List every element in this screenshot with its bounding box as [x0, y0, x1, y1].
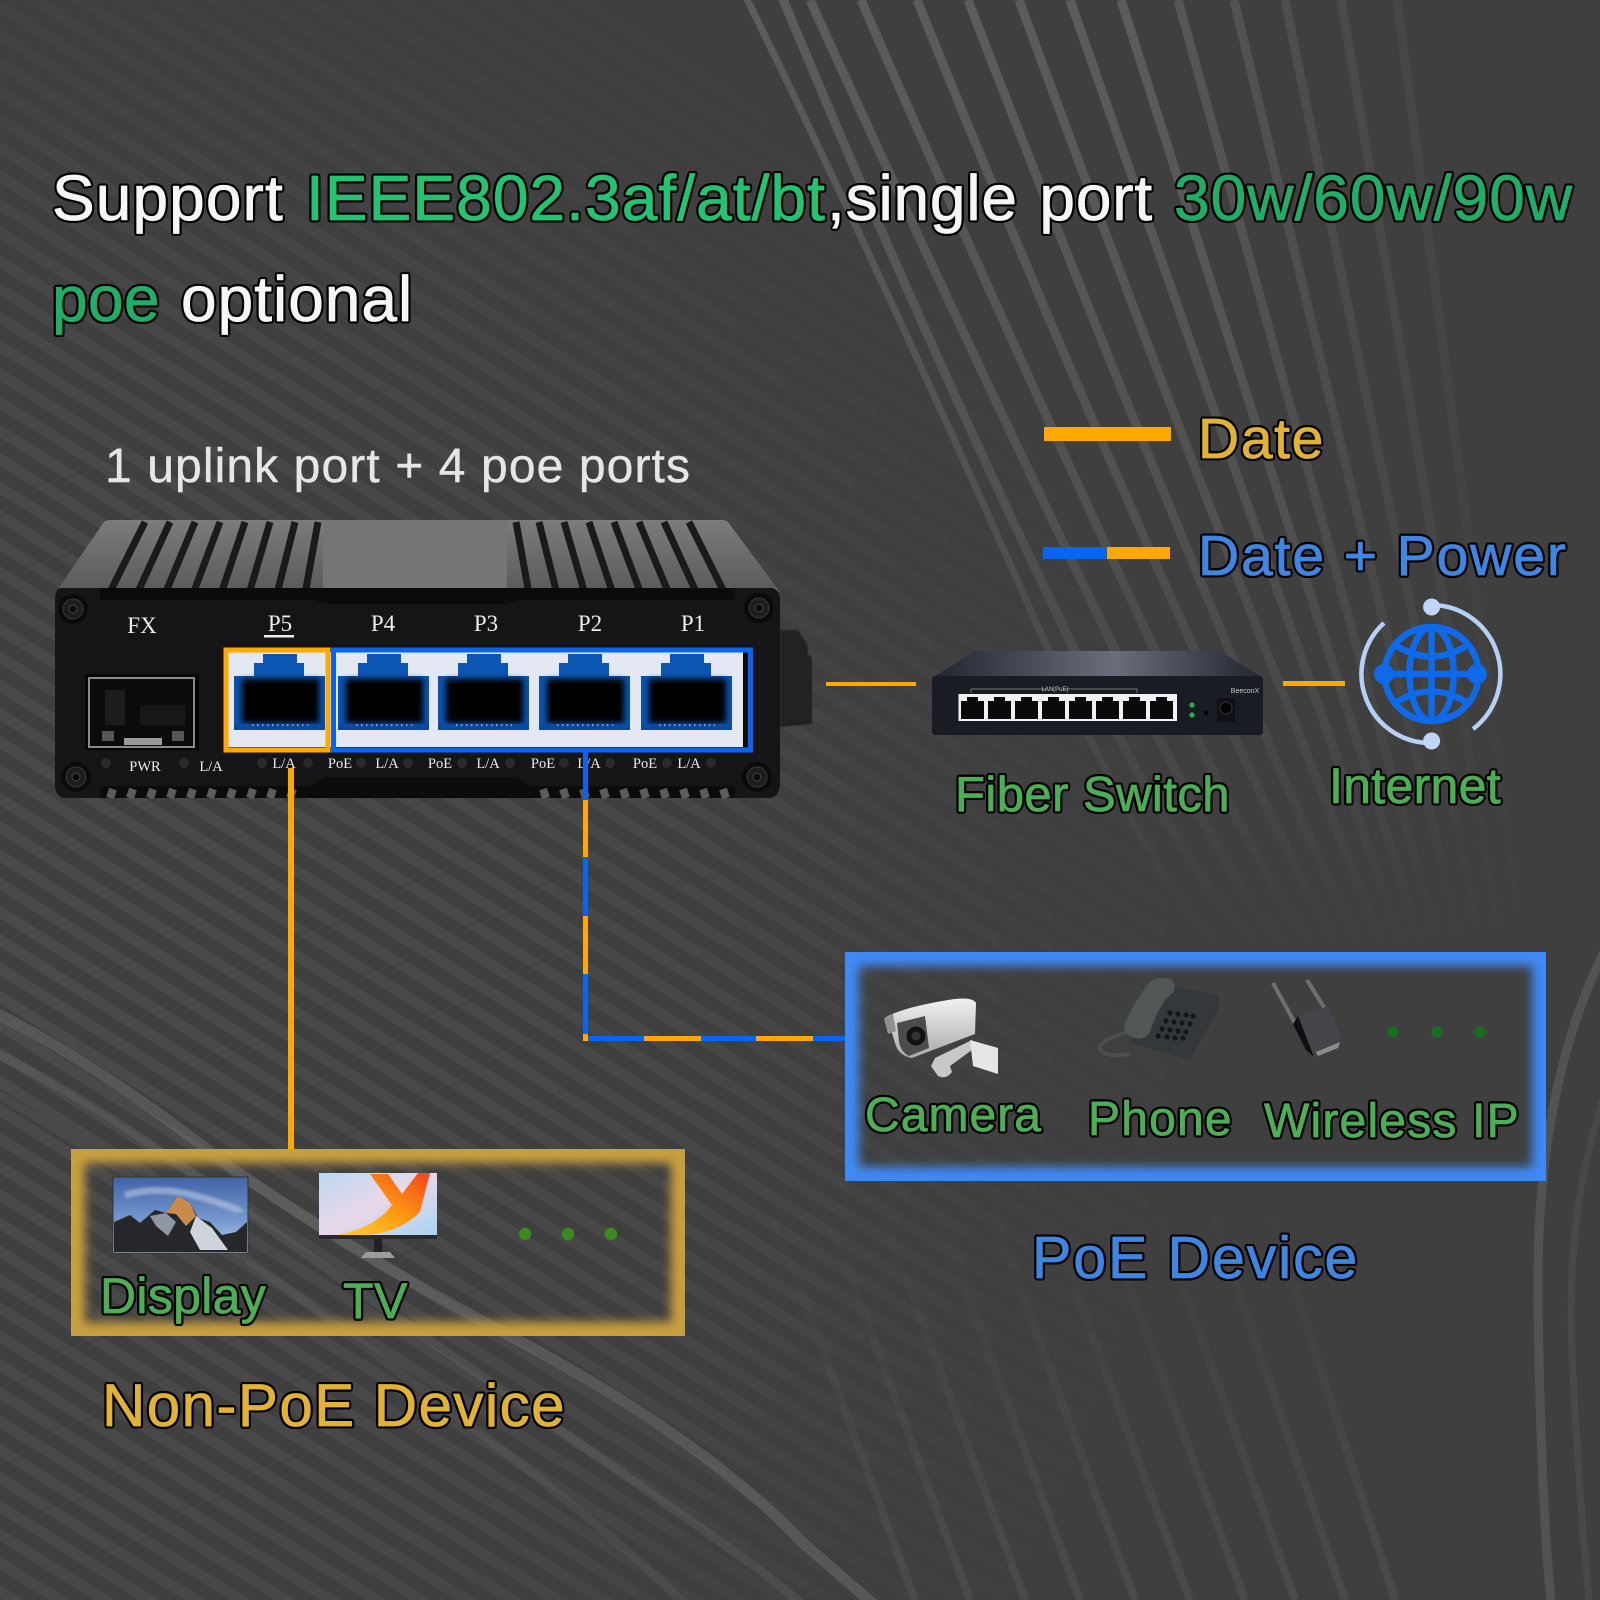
legend: data line — [1044, 427, 1171, 441]
title: IEEE802.3af/at/bt — [306, 162, 826, 234]
port labels: P2 — [578, 611, 602, 636]
reset button — [1204, 710, 1208, 716]
fiber switch — [932, 651, 1263, 735]
connection line: fiber switch to internet — [1283, 681, 1345, 686]
port labels: P5 — [268, 611, 292, 636]
blue PoE ports highlight — [334, 650, 750, 750]
LED labels: L/A — [199, 759, 223, 775]
DC jack — [1217, 698, 1235, 722]
status LEDs — [1189, 702, 1195, 718]
switch ports — [958, 694, 1177, 721]
LED labels: L/A — [476, 756, 500, 772]
connection line: P5 to non-PoE device — [288, 768, 294, 1150]
port labels — [127, 611, 705, 638]
legend — [1043, 407, 1568, 588]
legend: data label: Date — [1198, 407, 1325, 471]
icon: wireless access point — [1273, 980, 1342, 1057]
LED labels: PWR — [129, 759, 161, 775]
TV label: TV — [343, 1273, 408, 1329]
ellipsis dots — [519, 1228, 617, 1240]
device top with heat-sink fins — [56, 520, 780, 594]
LED labels: PoE — [428, 756, 452, 772]
wireless IP label: Wireless IP — [1264, 1095, 1520, 1148]
orbit dots — [1423, 598, 1440, 750]
white port panel — [228, 652, 743, 747]
LAN bracket — [971, 689, 1137, 693]
title: 30w/60w/90w — [1174, 162, 1573, 234]
right side terminal connector — [780, 630, 812, 727]
connection line: PoE ports to PoE device — [583, 752, 845, 1041]
title: optional — [181, 263, 413, 335]
title: ,single port — [827, 162, 1153, 234]
globe — [1385, 627, 1479, 721]
brand label: BeeconX — [1231, 688, 1260, 695]
LED labels: L/A — [272, 756, 296, 772]
LED labels: PoE — [633, 756, 657, 772]
connection line: switch to fiber switch — [826, 682, 916, 686]
screws — [58, 593, 774, 792]
LED labels — [129, 756, 701, 775]
LAN label: LAN(PoE) — [1041, 687, 1069, 693]
LED labels: L/A — [677, 756, 701, 772]
RJ45 port P4 — [338, 654, 429, 730]
title — [52, 162, 1575, 337]
port labels: P4 — [371, 611, 396, 636]
icon: security camera — [884, 999, 998, 1077]
PoE device heading: PoE Device — [1032, 1225, 1359, 1291]
device front face — [55, 588, 780, 798]
icon: desk phone — [1100, 978, 1219, 1060]
orange P5 highlight — [226, 650, 328, 750]
P5 underline — [264, 635, 294, 638]
black strip right of panel — [743, 653, 747, 746]
port labels: P1 — [681, 611, 705, 636]
legend: data + power label: Date + Power — [1198, 524, 1568, 588]
icon: internet globe — [1361, 598, 1500, 750]
switch top — [932, 651, 1263, 678]
RJ45 port P5 — [234, 654, 325, 730]
display label: Display — [100, 1268, 266, 1324]
port labels: FX — [127, 613, 157, 638]
icon: display with mountain — [113, 1177, 248, 1262]
panel: non-PoE devices — [71, 1149, 685, 1336]
LED labels: PoE — [328, 756, 352, 772]
internet label: Internet — [1329, 758, 1501, 814]
RJ45 port P1 — [641, 654, 732, 730]
LED labels: L/A — [577, 756, 601, 772]
camera label: Camera — [865, 1089, 1042, 1142]
orbit arcs — [1361, 605, 1500, 743]
subtitle: port count: 1 uplink port + 4 poe ports — [105, 440, 691, 493]
SFP fiber port — [85, 674, 199, 750]
LED labels: L/A — [375, 756, 399, 772]
legend: data + power line — [1043, 547, 1170, 559]
non-PoE device heading: Non-PoE Device — [102, 1372, 566, 1439]
icon: monitor — [319, 1173, 437, 1258]
panel: PoE devices — [845, 952, 1546, 1181]
port labels: P3 — [474, 611, 498, 636]
switch front — [932, 676, 1263, 735]
LED labels: PoE — [531, 756, 555, 772]
LED indicators — [101, 758, 716, 768]
RJ45 port P2 — [539, 654, 630, 730]
title: poe — [52, 263, 160, 335]
globe nodes — [1374, 664, 1487, 684]
title: Support — [52, 162, 284, 234]
fiber switch label: Fiber Switch — [955, 768, 1230, 822]
ellipsis dots — [1388, 1026, 1486, 1038]
bottom vent teeth — [100, 777, 735, 798]
RJ45 port P3 — [438, 654, 529, 730]
device: PoE switch — [55, 520, 812, 798]
phone label: Phone — [1088, 1093, 1233, 1146]
